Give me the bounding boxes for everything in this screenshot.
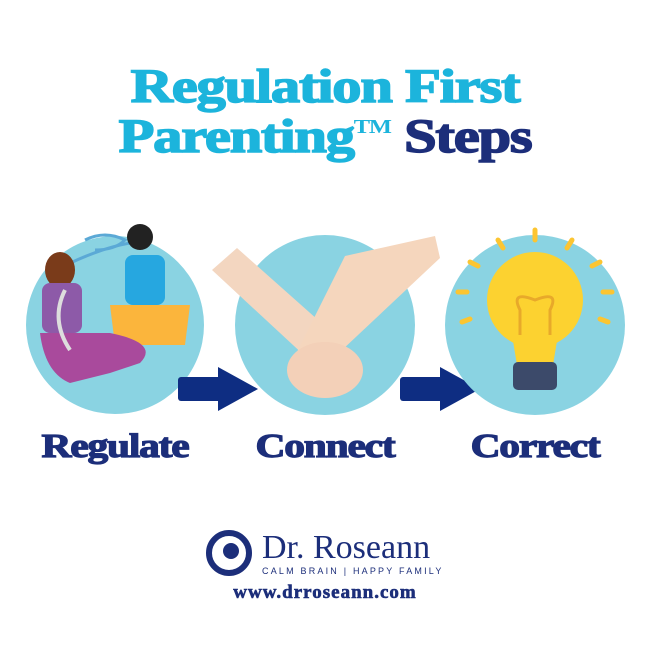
title: Regulation First	[131, 60, 519, 113]
title	[118, 60, 532, 163]
panel: correct	[445, 230, 625, 415]
label: correct: Correct	[471, 428, 599, 465]
logo text: CALM BRAIN | HAPPY FAMILY	[262, 566, 444, 576]
panel: regulate	[26, 224, 204, 414]
url: www.drroseann.com	[233, 582, 417, 603]
panel: connect	[212, 235, 440, 415]
arrow 2	[400, 367, 480, 411]
logo icon	[209, 533, 249, 573]
label: connect: Connect	[256, 428, 394, 465]
label: regulate: Regulate	[42, 428, 188, 465]
arrow 1	[178, 367, 258, 411]
logo text: Dr. Roseann	[262, 529, 430, 566]
title: ParentingTM Steps	[119, 110, 531, 163]
